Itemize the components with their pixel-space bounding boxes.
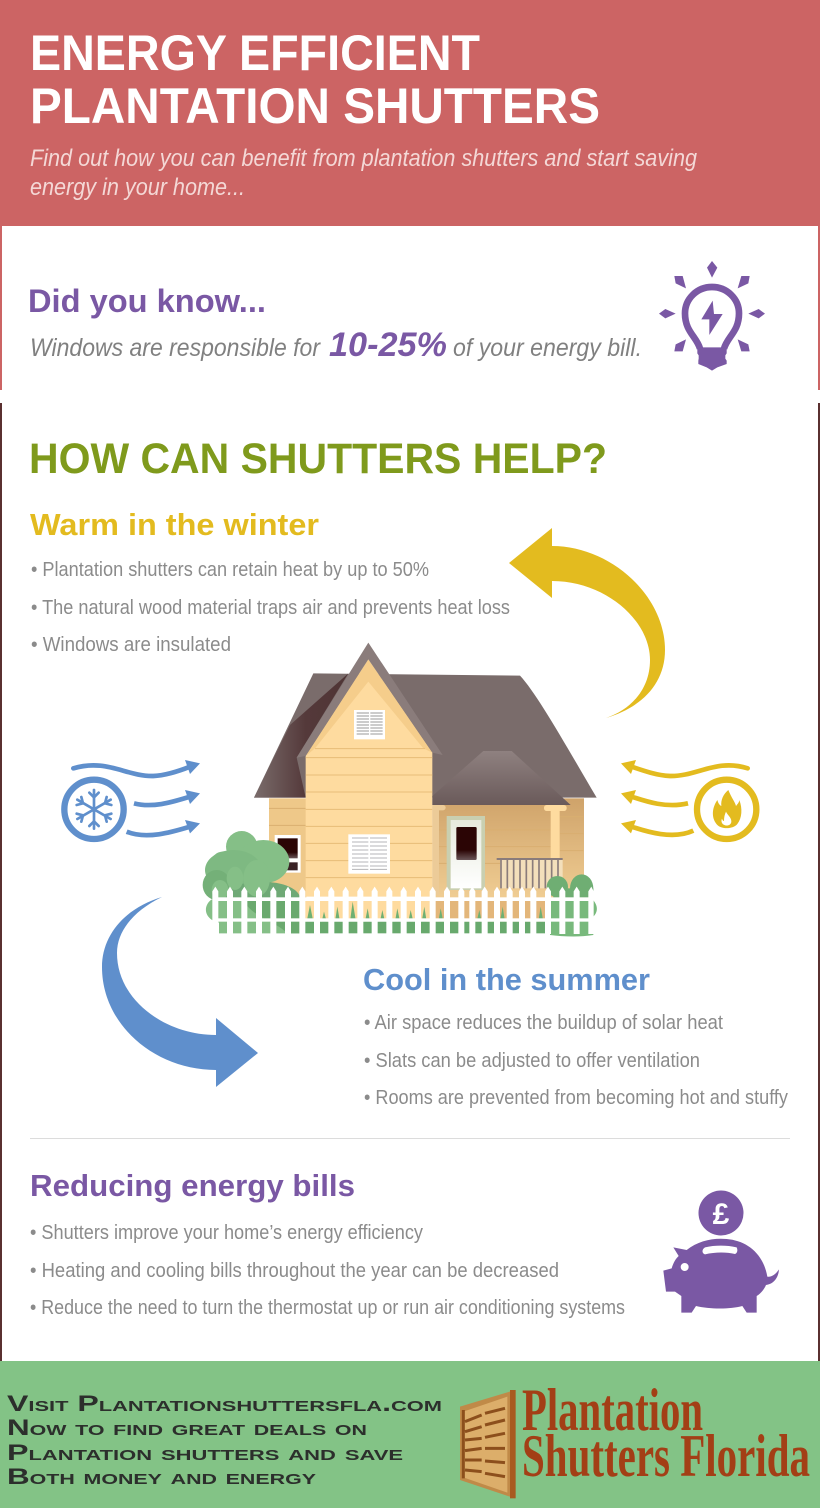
reducing bullets: • Reduce the need to turn the thermostat up or run air conditioning systems — [30, 1297, 625, 1319]
door — [447, 816, 485, 890]
icon: cold wind with snowflake — [64, 760, 200, 839]
section: reducing energy bills — [30, 1168, 625, 1319]
title — [30, 25, 600, 134]
lower shutter window — [348, 834, 390, 874]
main roof — [254, 673, 597, 798]
section: cool in the summer — [363, 962, 788, 1109]
section: warm in the winter — [30, 507, 510, 656]
logo wordmark: Plantation — [522, 1377, 703, 1443]
upper shutter window — [354, 710, 385, 739]
logo wordmark — [522, 1377, 810, 1489]
warm bullets: • The natural wood material traps air and prevents heat loss — [31, 597, 510, 619]
windows fact: Windows are responsible for — [30, 334, 322, 362]
warm bullets: • Windows are insulated — [31, 634, 231, 656]
porch columns — [432, 805, 567, 895]
warm heading: Warm in the winter — [30, 507, 319, 542]
subtitle — [30, 145, 698, 201]
reducing bullets: • Heating and cooling bills throughout the year can be decreased — [30, 1260, 559, 1282]
right bush — [547, 874, 593, 902]
cool bullets: • Air space reduces the buildup of solar heat — [364, 1012, 723, 1034]
cool bullets: • Rooms are prevented from becoming hot and stuffy — [364, 1087, 788, 1109]
gable trim — [297, 643, 443, 758]
side walls — [269, 798, 584, 898]
icon: light bulb — [659, 261, 765, 371]
left bush — [203, 831, 300, 915]
side border: did you know panel — [1, 226, 819, 390]
title: ENERGY EFFICIENT — [30, 25, 480, 81]
call to action — [7, 1391, 442, 1489]
side border: main panel — [1, 403, 819, 1361]
porch railing — [497, 859, 563, 888]
footer panel — [0, 1361, 820, 1508]
subtitle: energy in your home... — [30, 174, 245, 201]
did you know block — [28, 283, 642, 364]
reducing bullets — [30, 1222, 625, 1319]
call to action: Now to find great deals on — [7, 1415, 367, 1440]
reducing bullets: • Shutters improve your home’s energy efficiency — [30, 1222, 423, 1244]
subtitle: Find out how you can benefit from plantation shutters and start saving — [30, 145, 698, 172]
call to action: Visit Plantationshuttersfla.com — [7, 1391, 442, 1416]
title: PLANTATION SHUTTERS — [30, 78, 600, 134]
logo shutter icon — [460, 1390, 516, 1498]
warm bullets — [31, 559, 510, 656]
did you know heading: Did you know... — [28, 283, 266, 319]
warm bullets: • Plantation shutters can retain heat by up to 50% — [31, 559, 429, 581]
reducing heading: Reducing energy bills — [30, 1168, 355, 1203]
icon: warm wind with flame — [621, 760, 756, 839]
header panel — [0, 0, 820, 226]
garden ground — [206, 898, 597, 937]
arrow: large yellow curved — [509, 528, 665, 718]
call to action: Plantation shutters and save — [7, 1440, 403, 1465]
left window — [275, 835, 301, 873]
cool bullets: • Slats can be adjusted to offer ventilation — [364, 1050, 700, 1072]
call to action: Both money and energy — [7, 1464, 316, 1489]
main heading: HOW CAN SHUTTERS HELP? — [29, 435, 607, 483]
cool bullets — [364, 1012, 788, 1109]
icon: piggy bank with pound coin: £ — [713, 1198, 730, 1231]
icon: piggy bank with pound coin — [663, 1190, 779, 1313]
house illustration — [203, 643, 597, 937]
windows fact: of your energy bill. — [453, 334, 642, 362]
picket fence — [212, 887, 594, 934]
arrow: large blue curved — [102, 897, 258, 1087]
windows fact — [30, 326, 642, 364]
porch roof — [432, 751, 571, 805]
cool heading: Cool in the summer — [363, 962, 650, 997]
front wall — [306, 659, 432, 897]
windows fact: 10-25% — [329, 326, 447, 364]
